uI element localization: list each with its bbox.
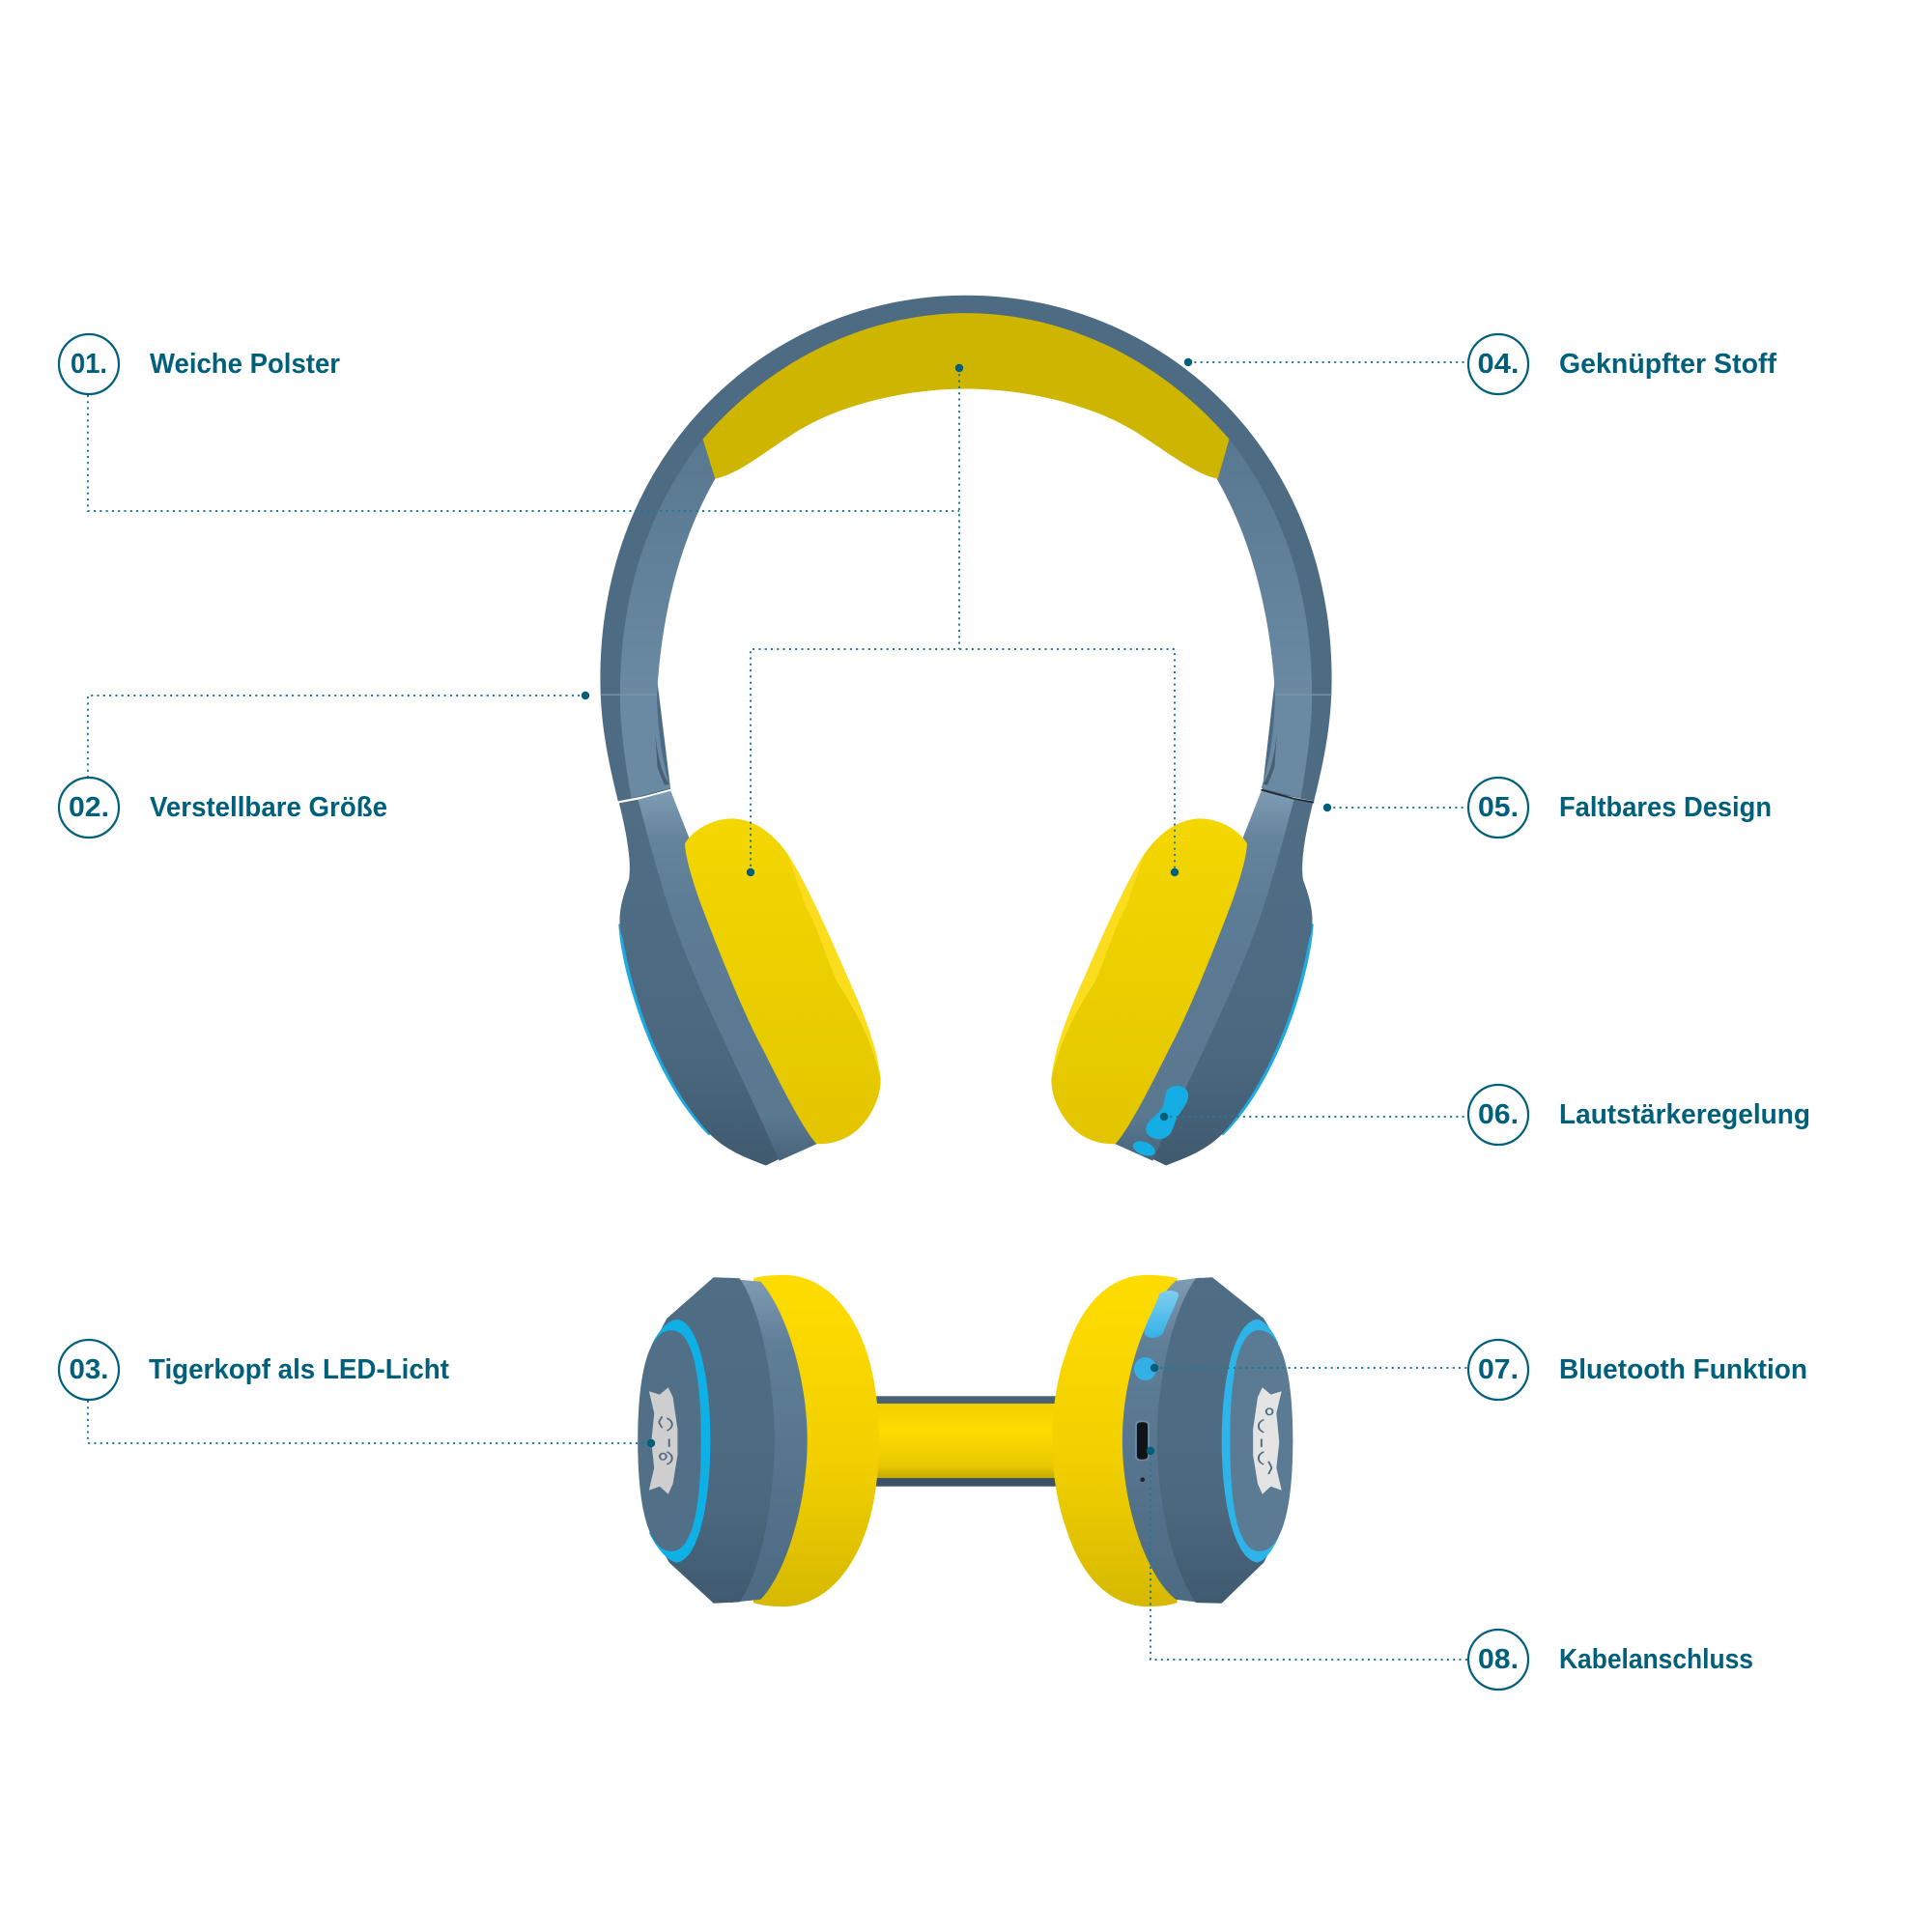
leader line 04 <box>1188 361 1468 363</box>
right ear cup <box>1115 791 1314 1166</box>
leader lines 01 <box>88 368 1175 872</box>
badge 07 <box>1468 1340 1528 1400</box>
right tiger head LED <box>1253 1387 1282 1494</box>
left disc <box>638 1330 701 1551</box>
left cup, bottom view <box>638 1277 808 1604</box>
bridge yellow pad <box>873 1404 1059 1478</box>
label 01: Weiche Polster <box>150 349 340 380</box>
badge 02 <box>59 778 119 838</box>
badge 07: 07. <box>1478 1354 1519 1385</box>
left fabric shell <box>639 1277 775 1604</box>
badge 04: 04. <box>1478 349 1519 380</box>
yellow headband padding <box>703 313 1229 479</box>
left ear cup <box>618 791 817 1166</box>
right cup light band <box>1115 791 1294 1161</box>
right cushion weave <box>1051 818 1247 1144</box>
left cup fabric shell <box>619 799 811 1166</box>
left tiger head LED <box>649 1387 677 1494</box>
volume and power buttons, front view <box>1131 1086 1188 1158</box>
bridge dark edges <box>873 1396 1059 1487</box>
right cushion inner lobe <box>1051 853 1145 1080</box>
mic hole <box>1140 1477 1145 1482</box>
label 08: Kabelanschluss <box>1559 1644 1753 1675</box>
right cup, bottom view <box>1122 1277 1293 1604</box>
callout 07: Bluetooth Funktion <box>1151 1340 1807 1400</box>
label 03: Tigerkopf als LED-Licht <box>149 1354 449 1385</box>
right cup blue edge <box>1217 922 1314 1135</box>
right fabric shell <box>1157 1277 1293 1604</box>
power button <box>1131 1139 1157 1158</box>
leader line 06 <box>1164 1116 1468 1118</box>
left cushion body <box>685 818 881 1144</box>
badge 05 <box>1468 778 1528 838</box>
volume button <box>1145 1291 1179 1338</box>
label 05: Faltbares Design <box>1559 792 1772 823</box>
anchor dot 04 <box>1184 358 1192 366</box>
anchor dot 03 <box>647 1439 655 1447</box>
usb-c port <box>1135 1421 1150 1461</box>
volume rocker <box>1146 1086 1188 1139</box>
callout 03: Tigerkopf als LED-Licht <box>59 1340 655 1447</box>
badge 05: 05. <box>1478 792 1519 823</box>
leader line 03 <box>88 1401 651 1443</box>
badge 03: 03. <box>70 1354 108 1385</box>
headband right light band <box>1217 440 1312 696</box>
anchor dot 07 <box>1151 1364 1158 1372</box>
left blue light ring <box>649 1320 710 1563</box>
left cushion, front view <box>685 818 881 1144</box>
anchor dot 06 <box>1160 1113 1168 1121</box>
left light ring <box>730 1279 808 1603</box>
leader line 02 <box>88 696 585 778</box>
anchor dots 01 <box>747 364 1179 876</box>
leader line 08 <box>1151 1451 1468 1660</box>
headband left light band <box>620 440 715 696</box>
badge 03 <box>59 1340 119 1400</box>
badge 01: 01. <box>71 349 107 380</box>
anchor dot 02 <box>582 692 589 699</box>
label 07: Bluetooth Funktion <box>1559 1354 1807 1385</box>
callout 08: Kabelanschluss <box>1147 1447 1753 1690</box>
anchor dot 05 <box>1323 804 1331 811</box>
badge 08: 08. <box>1478 1644 1519 1675</box>
callout 04: Geknüpfter Stoff <box>1184 334 1776 394</box>
right cup fabric shell <box>1121 799 1313 1166</box>
right cushion, bottom view <box>1052 1275 1178 1606</box>
power button <box>1134 1357 1156 1380</box>
leader line 05 <box>1327 807 1468 809</box>
headphones front view <box>600 296 1332 1166</box>
left cup light band <box>638 791 817 1161</box>
right blue light ring <box>1222 1320 1279 1563</box>
callout 02: Verstellbare Größe <box>59 692 589 838</box>
callout 06: Lautstärkeregelung <box>1160 1085 1810 1145</box>
badge 06 <box>1468 1085 1528 1145</box>
label 02: Verstellbare Größe <box>150 792 387 823</box>
badge 08 <box>1468 1630 1528 1690</box>
left cushion inner lobe <box>787 853 881 1080</box>
right cushion body <box>1051 818 1247 1144</box>
badge 06: 06. <box>1478 1099 1519 1130</box>
headband outer fabric <box>600 296 1332 801</box>
right cushion, front view <box>1051 818 1247 1144</box>
right slider <box>1262 695 1332 803</box>
left cushion weave <box>685 818 881 1144</box>
callout 01: Weiche Polster <box>59 334 1179 876</box>
left cup blue edge <box>618 922 715 1135</box>
right light ring <box>1122 1278 1201 1603</box>
headphones bottom view <box>638 1275 1293 1606</box>
label 06: Lautstärkeregelung <box>1559 1099 1810 1130</box>
padding weave <box>703 313 1229 479</box>
left cushion, bottom view <box>753 1275 879 1606</box>
left slider <box>600 695 670 803</box>
callout 05: Faltbares Design <box>1323 778 1772 838</box>
leader line 07 <box>1154 1367 1468 1369</box>
badge 02: 02. <box>69 792 109 823</box>
label 04: Geknüpfter Stoff <box>1559 349 1776 380</box>
badge 01 <box>59 334 119 394</box>
right disc <box>1230 1330 1293 1551</box>
badge 04 <box>1468 334 1528 394</box>
anchor dot 08 <box>1147 1447 1154 1455</box>
